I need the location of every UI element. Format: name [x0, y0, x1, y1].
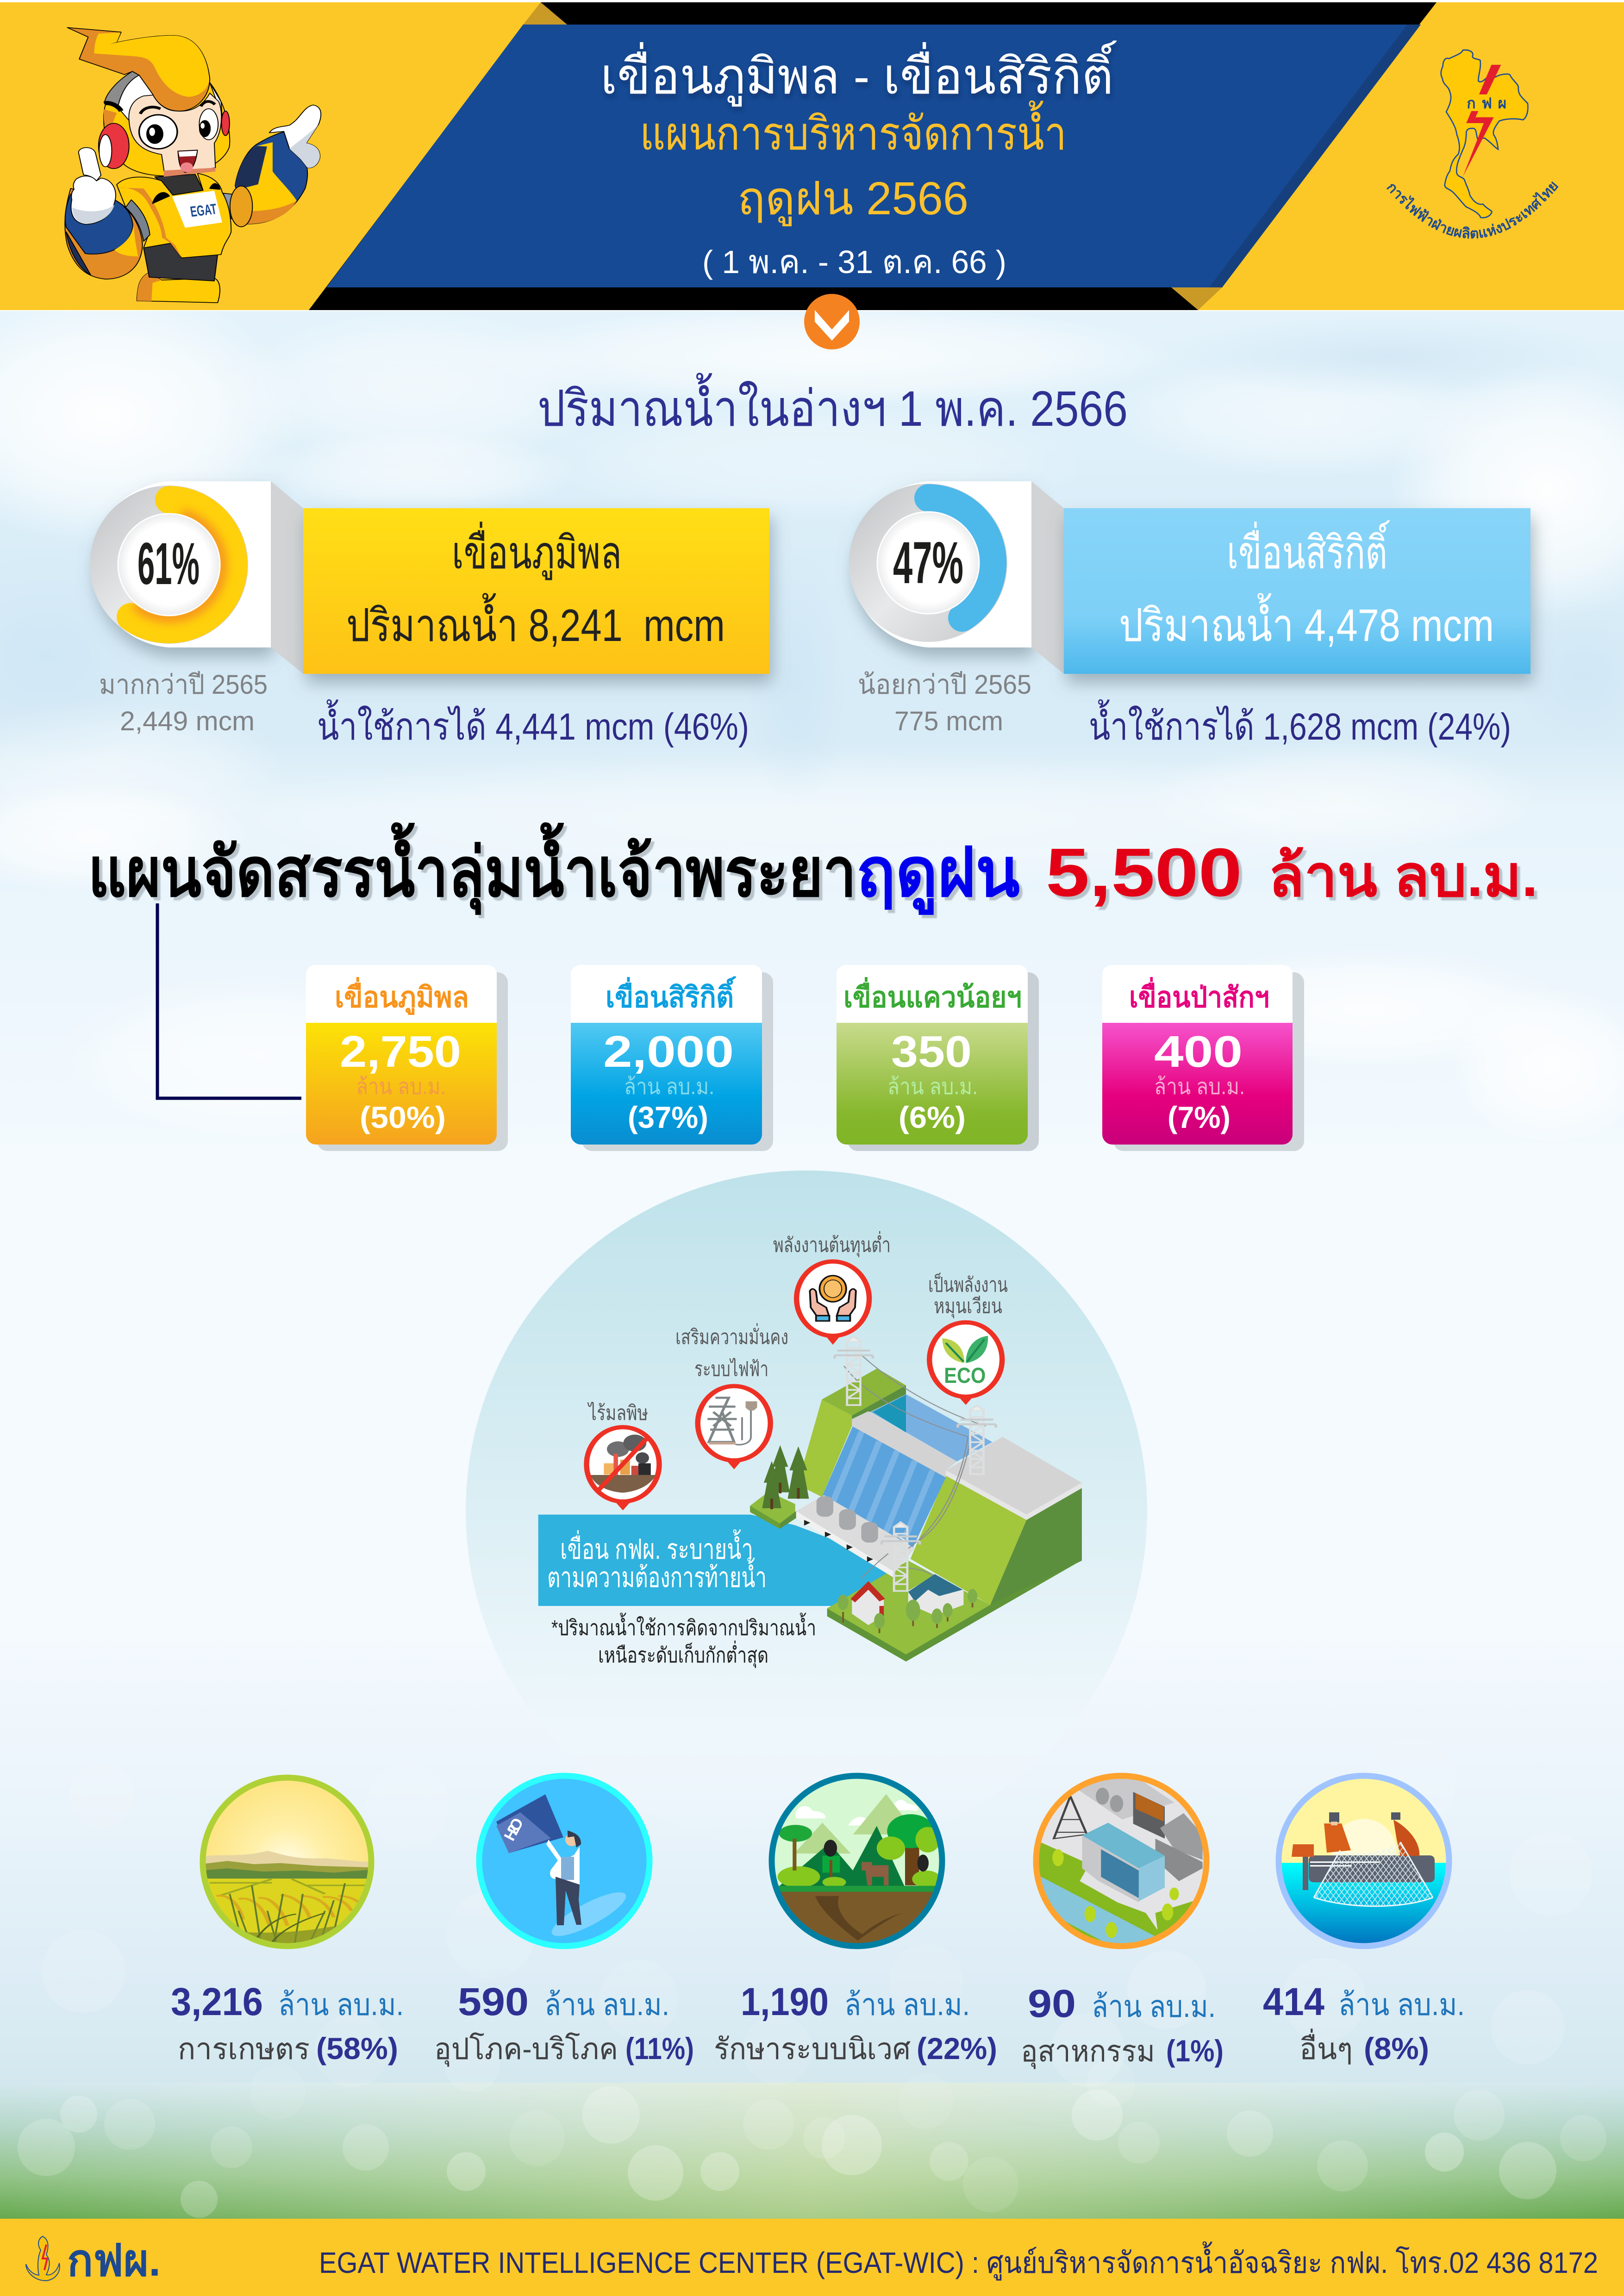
usage: agriculture: (58%) [316, 2031, 398, 2066]
mascot badge text: EGAT [189, 201, 218, 220]
pin: low cost energy [797, 1262, 869, 1344]
comparison with last year [858, 670, 1031, 736]
comparison with last year: 2,449 mcm [120, 706, 255, 736]
card: Khwae Noi allocation: เขื่อนแควน้อยฯ [843, 977, 1022, 1014]
value: 414 [1263, 1980, 1324, 2023]
illustration: rice field [206, 1781, 369, 1943]
mascot left arm [65, 188, 143, 279]
EGAT logo [1384, 50, 1562, 242]
main heading: ล้าน ลบ.ม. [1268, 844, 1538, 908]
mascot right arm [223, 105, 321, 227]
water banner text [547, 1529, 767, 1593]
usage: consumption: (11%) [625, 2031, 694, 2066]
spillway [822, 1411, 957, 1548]
usage: agriculture: ล้าน ลบ.ม. [278, 1987, 404, 2022]
pin labels: พลังงานต้นทุนต่ำ [773, 1231, 891, 1257]
card: Pasak allocation: เขื่อนป่าสักฯ [1129, 977, 1269, 1014]
transmission lines [844, 1355, 986, 1578]
towers [835, 1337, 996, 1591]
header subtitle plan: แผนการบริหารจัดการน้ำ [640, 100, 1067, 160]
footer logo wordmark: กฟผ. [67, 2236, 161, 2285]
usage: consumption [434, 1773, 694, 2067]
illustration: person pouring water: H2O [501, 1815, 527, 1844]
card: Khwae Noi allocation: 350 [891, 1027, 972, 1076]
main heading: ฤดูฝน [856, 834, 1020, 915]
card: Sirikit allocation: ล้าน ลบ.ม. [624, 1075, 714, 1099]
connector line [157, 903, 301, 1098]
powerhouse [796, 1495, 915, 1578]
label: การเกษตร [178, 2032, 310, 2066]
card: Bhumibol allocation: 2,750 [340, 1027, 461, 1076]
info box [1064, 508, 1530, 674]
usage: ecosystem: ล้าน ลบ.ม. [844, 1987, 970, 2022]
usable water: น้ำใช้การได้ 1,628 mcm (24%) [1089, 699, 1511, 748]
pin labels: เป็นพลังงาน [928, 1273, 1008, 1296]
usage: others: (8%) [1364, 2031, 1429, 2066]
icon: hands holding coin [810, 1276, 856, 1321]
pin: grid security [698, 1386, 770, 1469]
info box [303, 508, 769, 674]
info box: ปริมาณน้ำ 4,478 mcm [1119, 593, 1494, 651]
card: Khwae Noi allocation [837, 965, 1039, 1151]
comparison with last year [99, 670, 268, 736]
info box: เขื่อนสิริกิติ์ [1227, 520, 1390, 578]
pin: no pollution [587, 1427, 659, 1510]
footnote [551, 1612, 816, 1668]
usage: others: ล้าน ลบ.ม. [1338, 1987, 1465, 2022]
value: 3,216 [171, 1980, 263, 2023]
pin labels: ระบบไฟฟ้า [694, 1357, 768, 1381]
pin labels: หมุนเวียน [934, 1295, 1002, 1319]
footnote: *ปริมาณน้ำใช้การคิดจากปริมาณน้ำ [551, 1612, 816, 1640]
main right ground [827, 1437, 1082, 1661]
info box: เขื่อนภูมิพล [452, 522, 622, 580]
pin labels [587, 1231, 1008, 1425]
comparison with last year: 775 mcm [894, 706, 1003, 736]
card: Khwae Noi allocation: ล้าน ลบ.ม. [887, 1075, 978, 1099]
dam benefits circle background [466, 1170, 1147, 1852]
panel: Sirikit dam [849, 481, 1530, 748]
footer bar [0, 2219, 1624, 2296]
usable water: น้ำใช้การได้ 4,441 mcm (46%) [317, 699, 749, 748]
water banner [538, 1515, 906, 1606]
card: Pasak allocation: (7%) [1168, 1100, 1230, 1134]
card: Bhumibol allocation [306, 965, 508, 1151]
usage: agriculture [171, 1773, 404, 2066]
illustration: fishermen [1273, 1773, 1458, 1951]
header title: เขื่อนภูมิพล - เขื่อนสิริกิติ์ [600, 40, 1117, 107]
label: อุสาหกรรม [1021, 2035, 1155, 2069]
donut card: 61% [137, 531, 200, 597]
footer logo icon [26, 2236, 60, 2281]
illustration: forest [775, 1779, 939, 1943]
card: Khwae Noi allocation: (6%) [899, 1100, 966, 1134]
usage: ecosystem: (22%) [917, 2031, 997, 2066]
comparison with last year: มากกว่าปี 2565 [99, 670, 268, 700]
footnote: เหนือระดับเก็บกักต่ำสุด [598, 1640, 768, 1668]
section title: ปริมาณน้ำในอ่างฯ 1 พ.ค. 2566 [537, 373, 1128, 436]
card: Pasak allocation [1102, 965, 1304, 1151]
icon: ECO leaves [942, 1336, 988, 1388]
icon: factory pollution crossed out [591, 1435, 656, 1493]
dam illustration [538, 1262, 1082, 1661]
chevron down button [804, 294, 860, 349]
panel: Bhumibol dam [90, 481, 769, 748]
card: Bhumibol allocation: เขื่อนภูมิพล [335, 977, 469, 1015]
header banner [0, 2, 1624, 310]
card: Pasak allocation: ล้าน ลบ.ม. [1154, 1075, 1245, 1099]
mascot body [117, 174, 231, 258]
card: Pasak allocation: 400 [1154, 1027, 1243, 1076]
donut card: 47% [893, 530, 963, 596]
header date range: ( 1 พ.ค. - 31 ต.ค. 66 ) [702, 244, 1006, 280]
card: Sirikit allocation: เขื่อนสิริกิติ์ [606, 976, 737, 1014]
logo monogram: กฟผ [1467, 95, 1506, 112]
label: อื่นๆ [1299, 2028, 1353, 2066]
info box: ปริมาณน้ำ 8,241 mcm [346, 593, 725, 651]
mascot [65, 28, 321, 303]
mascot head [99, 71, 230, 177]
reservoir [870, 1394, 993, 1462]
value: 590 [458, 1980, 529, 2023]
usage: industry [1021, 1771, 1224, 2069]
icon: ECO leaves: ECO [944, 1363, 986, 1388]
usage: industry: (1%) [1166, 2034, 1224, 2068]
value: 90 [1028, 1982, 1076, 2025]
pin: renewable energy [930, 1322, 1002, 1405]
mascot left glove [71, 148, 116, 224]
usage: ecosystem [714, 1771, 997, 2066]
label: รักษาระบบนิเวศ [714, 2032, 911, 2066]
main heading: แผนจัดสรรน้ำลุ่มน้ำเจ้าพระยา [88, 822, 856, 915]
icon: pylon and plug [707, 1398, 757, 1445]
logo arc text: การไฟฟ้าฝ่ายผลิตแห่งประเทศไทย [1384, 178, 1562, 242]
header subtitle season: ฤดูฝน 2566 [737, 173, 968, 226]
left island with trees [750, 1445, 809, 1529]
main heading [88, 822, 1538, 915]
houses [838, 1574, 977, 1633]
mascot lightning hair [67, 28, 210, 111]
usage: consumption: ล้าน ลบ.ม. [544, 1987, 669, 2022]
map of Thailand [1441, 50, 1528, 218]
logo lightning bolt [1463, 65, 1501, 177]
illustration: person pouring water [482, 1779, 646, 1943]
pin labels: ไร้มลพิษ [587, 1401, 648, 1425]
card: Sirikit allocation: 2,000 [603, 1027, 734, 1076]
main heading: 5,500 [1046, 834, 1242, 911]
card: Sirikit allocation: (37%) [628, 1100, 708, 1134]
card: Bhumibol allocation: (50%) [360, 1100, 446, 1134]
label: อุปโภค-บริโภค [434, 2032, 618, 2067]
card: Sirikit allocation [571, 965, 773, 1151]
comparison with last year: น้อยกว่าปี 2565 [858, 670, 1031, 700]
pin labels: เสริมความมั่นคง [675, 1323, 788, 1349]
usage: others [1263, 1773, 1465, 2066]
water banner text: ตามความต้องการท้ายน้ำ [547, 1557, 767, 1593]
donut card [90, 481, 303, 674]
usage: industry: ล้าน ลบ.ม. [1092, 1989, 1216, 2023]
left hill [798, 1369, 906, 1497]
value: 1,190 [741, 1980, 829, 2023]
mascot legs and waist [137, 243, 220, 303]
water banner text: เขื่อน กฟผ. ระบายน้ำ [560, 1529, 753, 1565]
donut card [849, 481, 1064, 674]
card: Bhumibol allocation: ล้าน ลบ.ม. [356, 1075, 446, 1099]
illustration: factory [1028, 1771, 1217, 1954]
